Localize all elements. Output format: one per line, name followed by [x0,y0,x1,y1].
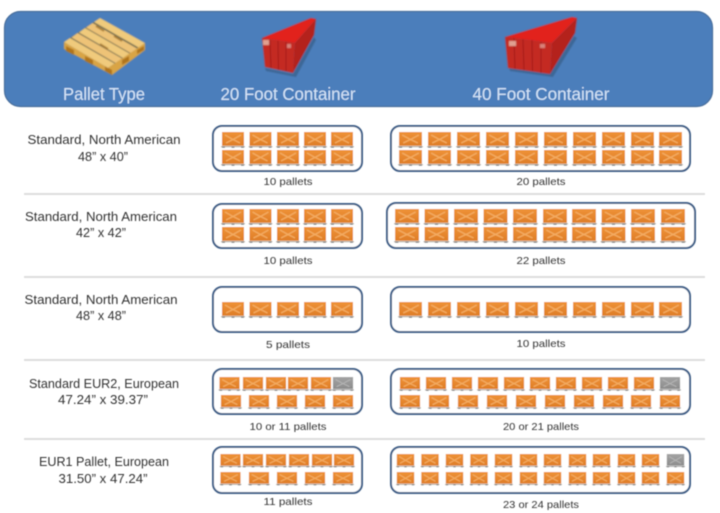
header band [4,12,712,106]
caption: 5 pallets [266,339,310,351]
diagram: row 3, 20 foot [213,287,362,332]
panel: row 1 standard 48 x 40 [28,126,690,188]
icon: 40 foot container [505,17,577,77]
label: row 3 pallet type: 48” x 48” [76,309,126,323]
diagram: row 1, 40 foot [391,126,690,171]
label: row 4 pallet type [29,377,179,407]
label: row 4 pallet type: Standard EUR2, European [29,377,179,391]
diagram: row 2, 40 foot [387,203,695,248]
heading: 20 foot container: 20 Foot Container [220,84,356,104]
label: row 4 pallet type: 47.24” x 39.37” [58,393,148,407]
label: row 1 pallet type [28,133,181,164]
label: row 3 pallet type: Standard, North American [24,293,178,307]
diagram: row 5, 20 foot [213,447,362,493]
label: row 3 pallet type [24,293,178,323]
diagram: row 4, 40 foot [391,369,690,414]
label: row 1 pallet type: 48” x 40” [78,150,128,164]
caption: 20 or 21 pallets [503,421,579,433]
diagram: row 1, 20 foot [213,126,362,171]
label: row 2 pallet type [25,210,177,240]
label: row 2 pallet type: 42” x 42” [76,226,126,240]
label: row 5 pallet type [39,455,169,486]
diagram: row 5, 40 foot [391,447,690,493]
label: row 1 pallet type: Standard, North American [28,133,181,147]
caption: 10 pallets [264,255,312,267]
heading: pallet type: Pallet Type [63,84,145,104]
label: row 2 pallet type: Standard, North American [25,210,177,224]
icon: wooden pallet [64,18,145,75]
panel: row 4 standard EUR2 [29,369,690,433]
caption: 10 pallets [264,176,312,188]
heading: 40 foot container: 40 Foot Container [472,84,610,104]
diagram: row 4, 20 foot [213,369,362,414]
diagram: row 3, 40 foot [391,287,690,332]
panel: row 5 EUR1 pallet [39,447,690,511]
diagram: row 2, 20 foot [213,204,362,248]
caption: 23 or 24 pallets [503,499,579,511]
caption: 11 pallets [264,496,312,508]
panel: row 3 standard 48 x 48 [24,287,690,351]
panel: row 2 standard 42 x 42 [25,203,695,267]
caption: 10 pallets [516,338,566,350]
caption: 22 pallets [516,255,566,267]
label: row 5 pallet type: 31.50” x 47.24” [58,472,148,486]
caption: 20 pallets [516,176,566,188]
icon: 20 foot container [262,18,316,77]
label: row 5 pallet type: EUR1 Pallet, European [39,455,169,469]
caption: 10 or 11 pallets [250,421,326,433]
